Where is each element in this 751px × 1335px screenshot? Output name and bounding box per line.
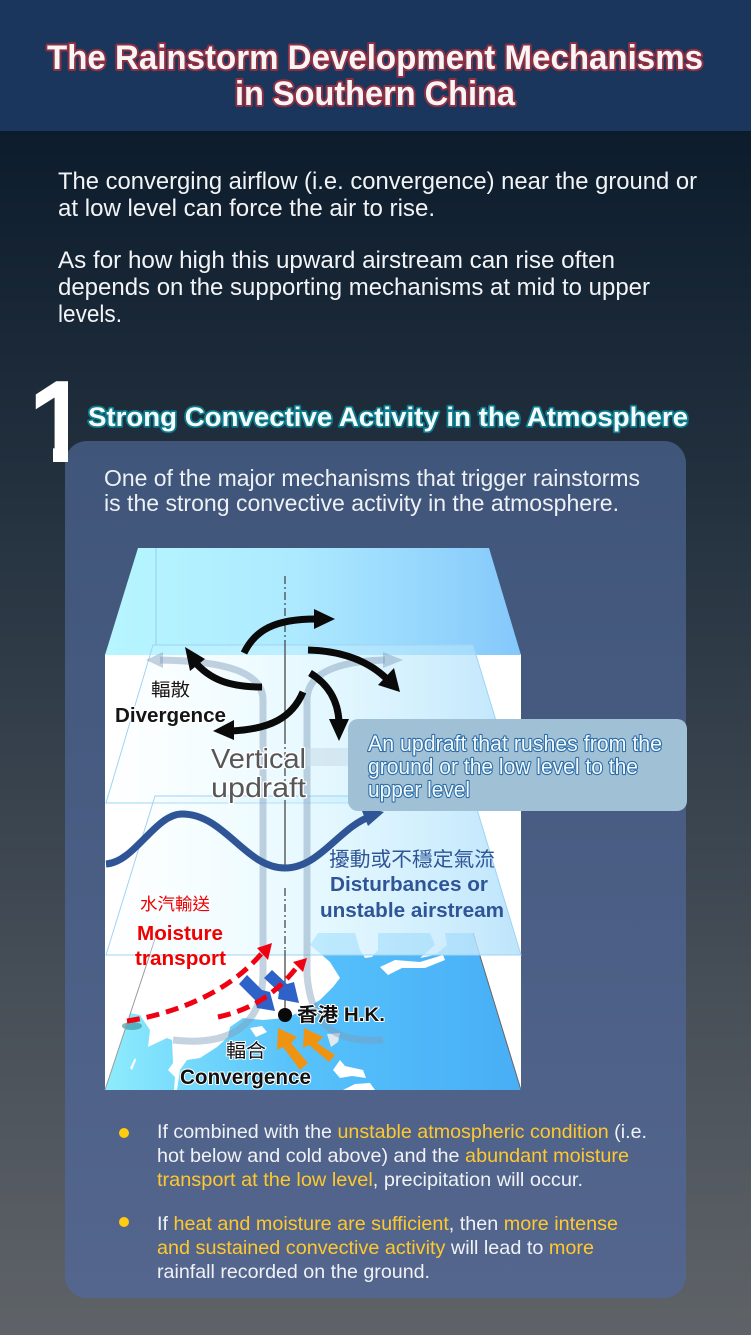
orange arrows <box>277 1028 335 1070</box>
label: divergence: Divergence <box>115 705 226 727</box>
callout: updraft <box>348 719 687 811</box>
bullet 2: If heat and moisture are sufficient, then more intense <box>157 1213 618 1235</box>
label: convergence: Convergence <box>180 1066 311 1089</box>
map: sea and land <box>105 933 521 1090</box>
label: disturbances: Disturbances or <box>330 874 488 896</box>
updraft streams <box>146 652 403 1041</box>
callout: updraft: An updraft that rushes from the <box>368 731 662 756</box>
panel intro text <box>104 465 640 516</box>
blue arrows <box>239 970 299 1011</box>
label: convergence: 輻合 <box>226 1040 266 1062</box>
intro text: levels. <box>58 301 122 328</box>
bullet 1: transport at the low level, precipitation will occur. <box>157 1169 583 1191</box>
label: disturbances: 擾動或不穩定氣流 <box>329 848 495 871</box>
panel: convective activity <box>65 441 686 1298</box>
label: moisture transport <box>135 895 226 970</box>
label: disturbances: unstable airstream <box>320 900 504 922</box>
label: vertical updraft: updraft <box>211 772 306 803</box>
label: divergence <box>115 680 226 727</box>
intro text <box>58 168 697 328</box>
title: The Rainstorm Development Mechanisms <box>47 39 703 77</box>
header band <box>0 0 751 131</box>
callout: updraft: ground or the low level to the <box>368 754 638 779</box>
vertical axis <box>284 576 286 1010</box>
label: vertical updraft <box>211 743 306 803</box>
section heading: Strong Convective Activity in the Atmosphere <box>88 402 688 432</box>
panel intro text: One of the major mechanisms that trigger rainstorms <box>104 465 640 491</box>
intro text: The converging airflow (i.e. convergence) near the ground or <box>58 168 697 195</box>
upper slab <box>106 645 521 803</box>
section number: 1 <box>29 359 92 486</box>
bullet 2: rainfall recorded on the ground. <box>157 1261 430 1283</box>
diagram: atmosphere layers <box>105 548 521 1090</box>
label: convergence <box>180 1040 311 1089</box>
label: disturbances <box>320 848 504 922</box>
bullet 1: If combined with the unstable atmospheric condition (i.e. <box>157 1121 647 1143</box>
title <box>47 39 703 113</box>
wave: disturbances <box>106 806 384 868</box>
label: moisture transport: 水汽輸送 <box>140 895 210 914</box>
divergence arrows <box>185 609 400 741</box>
box background <box>105 654 521 1090</box>
panel intro text: is the strong convective activity in the atmosphere. <box>104 490 619 516</box>
marker: Hong Kong: 香港 H.K. <box>297 1004 385 1026</box>
roof <box>105 548 521 655</box>
label: divergence: 輻散 <box>151 680 190 700</box>
label: moisture transport: transport <box>135 948 226 970</box>
title: in Southern China <box>235 75 516 113</box>
intro text: As for how high this upward airstream can rise often <box>58 247 615 274</box>
intro text: at low level can force the air to rise. <box>58 195 435 222</box>
moisture arrows <box>127 943 307 1021</box>
label: moisture transport: Moisture <box>137 923 223 945</box>
intro text: depends on the supporting mechanisms at mid to upper <box>58 274 650 301</box>
bullet 1: hot below and cold above) and the abundant moisture <box>157 1145 629 1167</box>
bullet 2 <box>119 1213 618 1283</box>
label: vertical updraft: Vertical <box>211 743 306 774</box>
lower slab <box>106 796 521 955</box>
bullet 1 <box>119 1121 647 1191</box>
callout: updraft: upper level <box>368 777 470 802</box>
bullet 2: and sustained convective activity will lead to more <box>157 1237 594 1259</box>
